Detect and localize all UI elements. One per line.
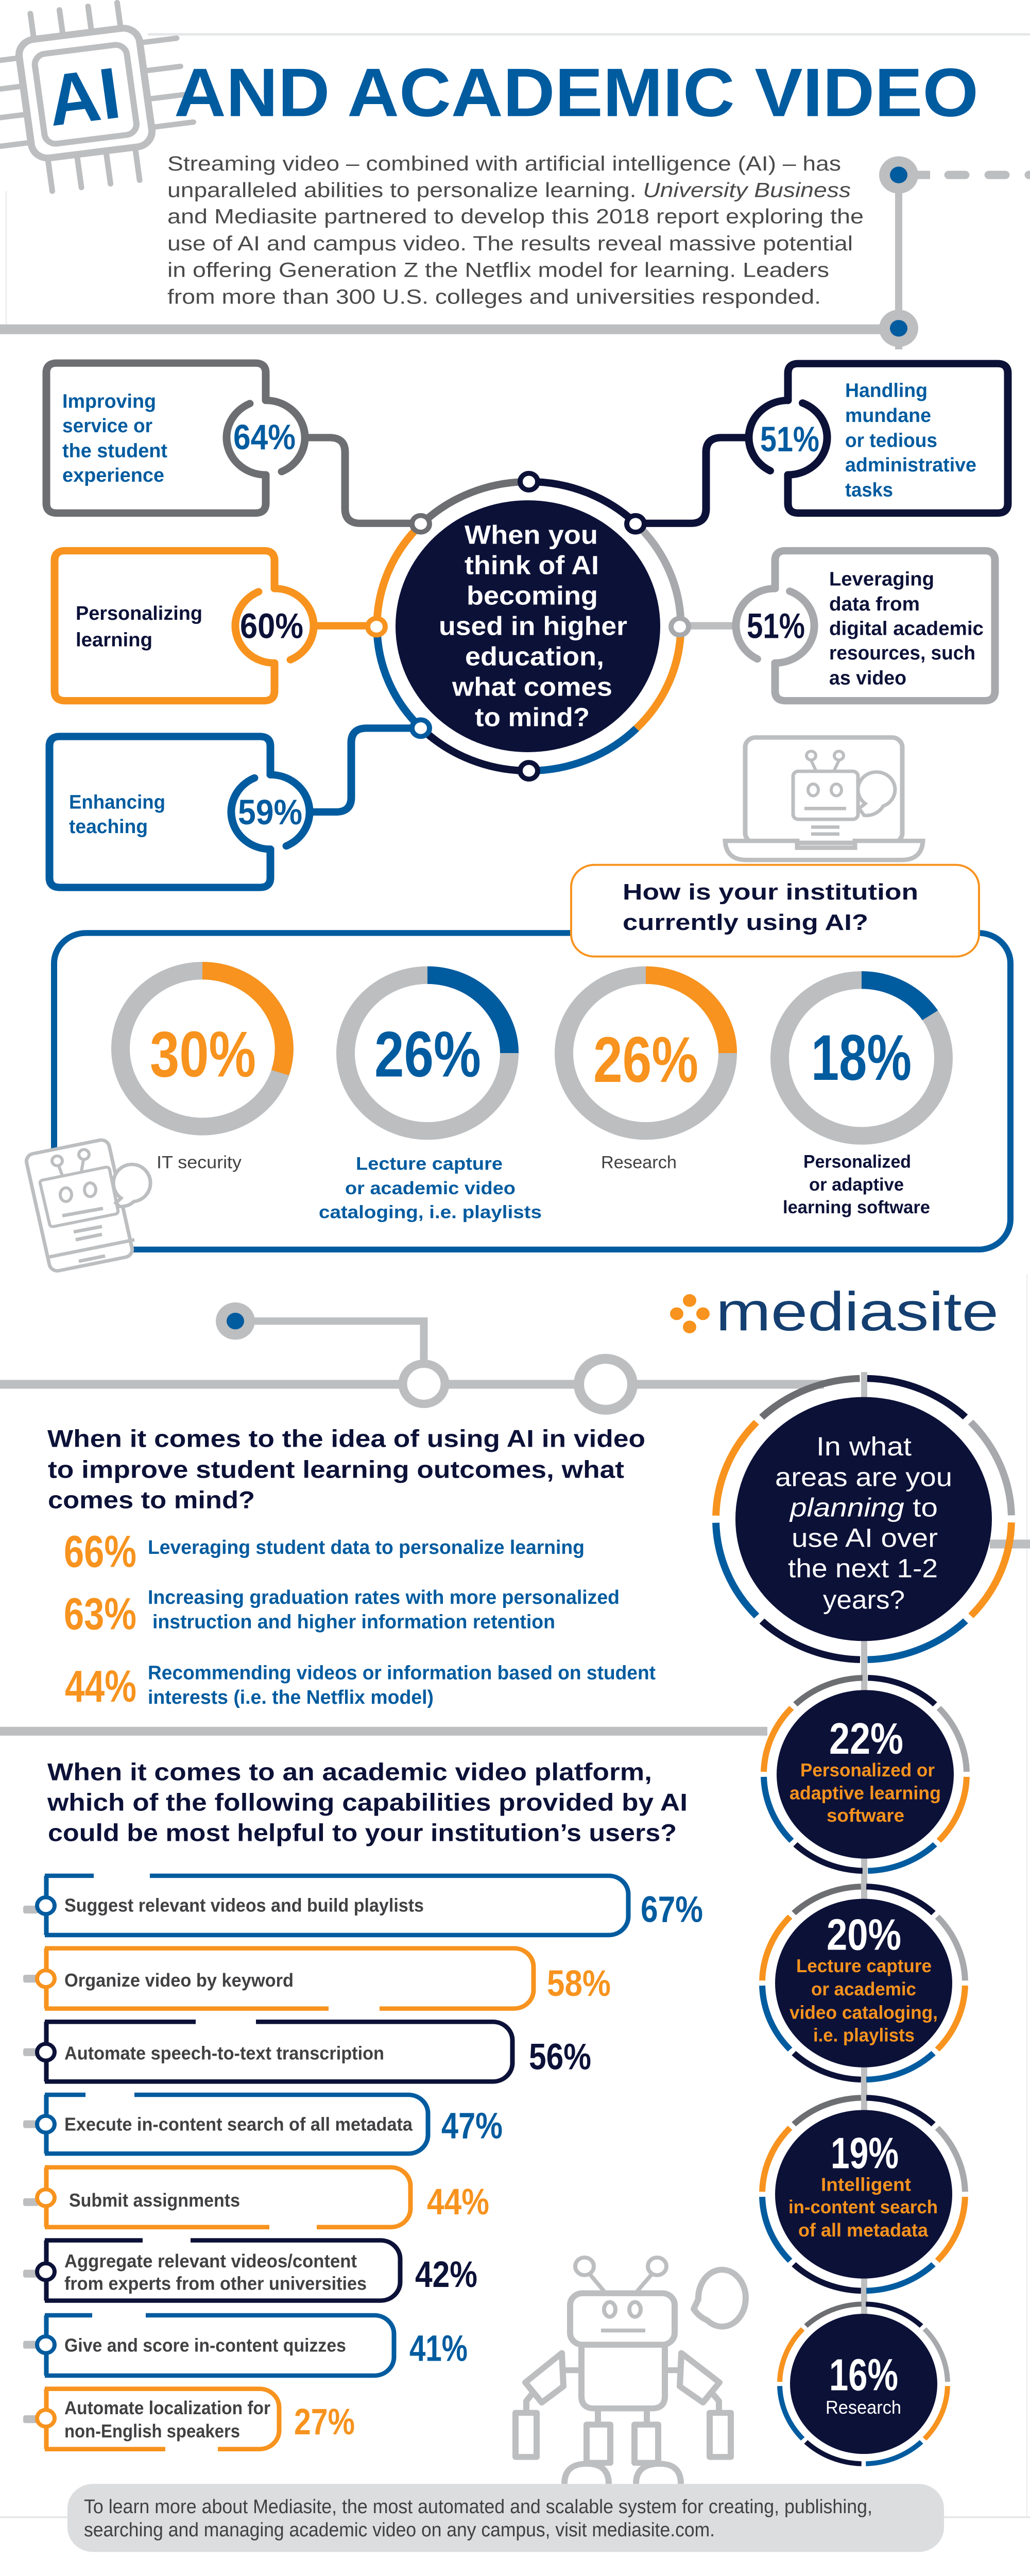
intro text block: Streaming video – combined with artificial intelligence (AI) – has <box>167 152 841 175</box>
mediasite logo: mediasite <box>716 1281 999 1343</box>
bar: organize by keyword 58%: 58% <box>547 1963 611 2004</box>
panel: handling mundane tasks: administrative <box>845 454 976 476</box>
donut: 18% personalized: or adaptive <box>809 1174 904 1195</box>
donut: 26% research: Research <box>601 1153 677 1172</box>
donut: 26% research <box>564 975 728 1172</box>
circle: 22% personalized: software <box>827 1805 904 1826</box>
circle: 20% lecture capture <box>720 1846 1007 2120</box>
circle: 19% in-content search: 19% <box>831 2128 899 2178</box>
big circle: planning question: years? <box>823 1585 905 1615</box>
bar: suggest videos 67%: 67% <box>641 1889 703 1930</box>
donut: 18% personalized <box>780 980 943 1217</box>
bar: organize by keyword 58%: Organize video by keyword <box>64 1970 294 1991</box>
footer callout: searching and managing academic video on any campus, visit mediasite.com. <box>84 2519 715 2541</box>
bar: aggregate content 42%: Aggregate relevant videos/content <box>64 2250 357 2272</box>
central question circle: used in higher <box>439 612 627 641</box>
panel: personalizing learning <box>55 551 314 701</box>
bar: speech to text 56% <box>23 2022 591 2081</box>
bar: localization 27%: 27% <box>294 2401 355 2443</box>
circle: 16% research: Research <box>826 2397 901 2418</box>
panel: improving service: Improving <box>62 391 156 412</box>
panel: leveraging data: as video <box>829 668 906 689</box>
panel: improving service: service or <box>62 415 152 437</box>
bar: localization 27%: Automate localization for <box>64 2397 270 2418</box>
chip label AI: AI <box>42 52 125 141</box>
icon: laptop robot <box>725 737 923 860</box>
stat: 44%: Recommending videos or information based on student <box>148 1662 656 1684</box>
circle: 20% lecture capture: or academic <box>811 1978 916 1999</box>
circle: 19% in-content search <box>720 2058 1007 2331</box>
central question circle: what comes <box>452 672 612 702</box>
intro text block: use of AI and campus video. The results reveal massive potential <box>167 232 853 255</box>
panel: personalizing learning: Personalizing <box>76 603 202 624</box>
donut: 26% research: 26% <box>593 1024 698 1096</box>
intro text block: and Mediasite partnered to develop this 2018 report exploring the <box>167 205 864 228</box>
bar: aggregate content 42%: from experts from other universities <box>64 2273 367 2294</box>
bar: suggest videos 67% <box>23 1876 703 1935</box>
bar: submit assignments 44%: 44% <box>427 2181 489 2223</box>
icon: AI chip <box>0 0 200 198</box>
panel: enhancing teaching: teaching <box>69 816 148 838</box>
icon: robot <box>516 2258 746 2484</box>
bar: quizzes 41%: Give and score in-content quizzes <box>64 2334 346 2355</box>
circle: 19% in-content search: Intelligent <box>821 2174 911 2195</box>
circle: 20% lecture capture: i.e. playlists <box>813 2024 915 2045</box>
stat: 63% <box>64 1587 620 1639</box>
heading: improve student learning outcomes: to improve student learning outcomes, what <box>48 1456 624 1483</box>
icon: phone robot <box>25 1139 150 1272</box>
circle: 22% personalized: Personalized or <box>800 1759 935 1781</box>
central question circle: to mind? <box>475 703 590 732</box>
stat: 63%: Increasing graduation rates with more personalized <box>148 1587 620 1608</box>
donut: 30% IT security: 30% <box>150 1019 256 1091</box>
bar: quizzes 41% <box>23 2315 468 2376</box>
stat: 44%: interests (i.e. the Netflix model) <box>148 1687 434 1708</box>
panel: improving service: the student <box>62 440 167 462</box>
heading: capabilities question: could be most helpful to your institution’s users? <box>48 1819 677 1846</box>
bar: quizzes 41%: 41% <box>409 2328 468 2369</box>
donut: 18% personalized: 18% <box>811 1022 912 1094</box>
heading: improve student learning outcomes <box>47 1426 645 1514</box>
donut: 30% IT security: IT security <box>157 1153 242 1172</box>
donut: 18% personalized: learning software <box>783 1197 930 1217</box>
heading: improve student learning outcomes: When it comes to the idea of using AI in video <box>47 1426 645 1452</box>
heading: improve student learning outcomes: comes to mind? <box>48 1487 255 1514</box>
circle: 20% lecture capture: 20% <box>827 1910 901 1959</box>
stat: 44% <box>65 1662 656 1712</box>
bar: submit assignments 44%: Submit assignments <box>69 2190 240 2211</box>
bar: speech to text 56%: Automate speech-to-text transcription <box>64 2042 384 2063</box>
stat: 66%: Leveraging student data to personalize learning <box>148 1537 585 1558</box>
panel: improving service <box>46 363 305 513</box>
panel: leveraging data <box>736 551 995 701</box>
panel: improving service: 64% <box>233 417 296 457</box>
donut: 26% lecture capture: or academic video <box>345 1178 516 1198</box>
footer callout: To learn more about Mediasite, the most automated and scalable system for creating, publishing, <box>84 2496 872 2518</box>
bar: suggest videos 67%: Suggest relevant videos and build playlists <box>64 1894 424 1916</box>
panel: how institution uses AI <box>54 933 1010 1249</box>
circle: 20% lecture capture: Lecture capture <box>796 1955 932 1976</box>
stat: 63%: instruction and higher information retention <box>152 1611 555 1633</box>
circle: 22% personalized: 22% <box>829 1714 903 1764</box>
panel: leveraging data: digital academic <box>829 618 984 639</box>
connectors from boxes to central circle <box>305 437 749 812</box>
heading: capabilities question <box>47 1758 688 1846</box>
bar: submit assignments 44% <box>23 2167 489 2227</box>
donut: 26% lecture capture <box>319 975 542 1222</box>
panel: enhancing teaching <box>49 737 310 887</box>
bar: in-content search 47%: 47% <box>441 2105 503 2146</box>
bar: organize by keyword 58% <box>23 1948 611 2009</box>
big circle: planning question: areas are you <box>775 1463 952 1492</box>
bar: speech to text 56%: 56% <box>529 2036 591 2077</box>
circle: 16% research <box>745 2271 982 2497</box>
donut: 30% IT security <box>121 971 284 1172</box>
callout: how is your institution currently using AI <box>571 865 979 957</box>
panel: personalizing learning: learning <box>76 629 152 651</box>
circle: 20% lecture capture: video cataloging, <box>789 2002 938 2023</box>
stat: 63%: 63% <box>64 1589 136 1639</box>
donut: 26% lecture capture: 26% <box>374 1019 481 1091</box>
panel: enhancing teaching: 59% <box>238 792 302 832</box>
panel: handling mundane tasks <box>749 364 1008 513</box>
panel: leveraging data: data from <box>829 594 920 615</box>
central question circle: think of AI <box>465 551 599 580</box>
bar: localization 27%: non-English speakers <box>64 2420 240 2442</box>
big circle: planning question: the next 1-2 <box>788 1554 938 1583</box>
intro text block <box>167 152 864 308</box>
bar: aggregate content 42% <box>23 2240 477 2300</box>
stat: 66% <box>64 1527 585 1577</box>
bar: in-content search 47%: Execute in-content search of all metadata <box>64 2113 413 2134</box>
circle: 22% personalized <box>722 1638 1009 1911</box>
footer callout <box>67 2484 944 2552</box>
panel: handling mundane tasks: mundane <box>845 405 931 427</box>
central question circle <box>368 473 689 779</box>
bar: aggregate content 42%: 42% <box>415 2254 477 2295</box>
circle: 22% personalized: adaptive learning <box>789 1782 941 1803</box>
bar: localization 27% <box>23 2389 355 2449</box>
stat: 44%: 44% <box>65 1662 136 1712</box>
bar: in-content search 47% <box>23 2095 503 2154</box>
panel: leveraging data: resources, such <box>829 642 975 664</box>
intro text block: from more than 300 U.S. colleges and universities responded. <box>167 285 821 308</box>
big circle: planning question <box>655 1320 1030 1718</box>
panel: enhancing teaching: Enhancing <box>69 791 165 813</box>
big circle: planning question: use AI over <box>792 1523 938 1553</box>
heading: capabilities question: When it comes to an academic video platform, <box>47 1758 652 1786</box>
stat: 66%: 66% <box>64 1527 136 1577</box>
central question circle: When you <box>465 520 598 550</box>
panel: handling mundane tasks: Handling <box>845 380 928 401</box>
central question circle: becoming <box>467 581 598 611</box>
panel: handling mundane tasks: 51% <box>760 419 819 459</box>
panel: improving service: experience <box>62 465 164 486</box>
heading: capabilities question: which of the following capabilities provided by AI <box>47 1789 688 1816</box>
circle: 19% in-content search: in-content search <box>788 2196 938 2217</box>
donut: 18% personalized: Personalized <box>803 1151 911 1172</box>
callout: how is your institution currently using AI: How is your institution <box>623 879 918 905</box>
callout: how is your institution currently using AI: currently using AI? <box>623 909 868 935</box>
circle: 19% in-content search: of all metadata <box>798 2219 928 2241</box>
title: AND ACADEMIC VIDEO <box>174 54 978 131</box>
panel: handling mundane tasks: tasks <box>845 479 893 501</box>
circle: 16% research: 16% <box>829 2350 898 2400</box>
big circle: planning question: planning to <box>789 1493 938 1522</box>
panel: handling mundane tasks: or tedious <box>845 430 937 451</box>
panel: personalizing learning: 60% <box>240 606 303 646</box>
second timeline connector <box>0 1302 1030 2318</box>
panel: leveraging data: Leveraging <box>829 568 934 590</box>
header timeline connector <box>0 156 1030 349</box>
intro text block: in offering Generation Z the Netflix model for learning. Leaders <box>167 258 829 281</box>
donut: 26% lecture capture: cataloging, i.e. playlists <box>319 1201 542 1222</box>
big circle: planning question: In what <box>816 1432 912 1462</box>
donut: 26% lecture capture: Lecture capture <box>356 1153 503 1174</box>
central question circle: education, <box>465 642 604 671</box>
panel: leveraging data: 51% <box>747 606 805 646</box>
intro text block: unparalleled abilities to personalize learning. University Business <box>167 178 851 201</box>
